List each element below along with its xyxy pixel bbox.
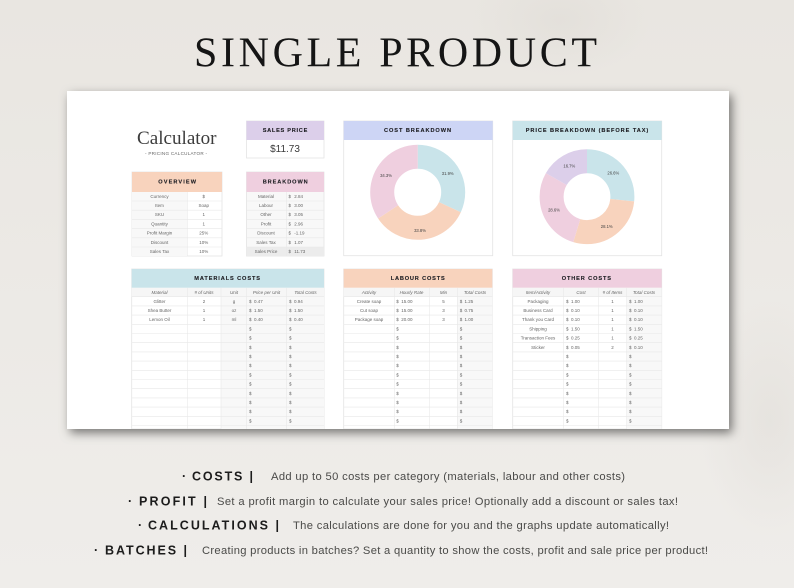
table: labour costs: 15.00 [401,308,413,313]
table: materials costs: 0.40 [294,317,303,322]
table: labour costs: $ [460,354,463,359]
panel: breakdown: $ [288,212,292,217]
table: labour costs: $ [460,326,463,331]
feature: profit: PROFIT | [139,494,207,508]
panel: breakdown: Labour [259,203,274,208]
table: other costs: Business Card [523,308,553,313]
table: other costs [513,269,662,430]
panel: breakdown: 3.05 [294,212,304,217]
panel: price breakdown chart [513,121,662,256]
table: materials costs: $ [289,317,292,322]
table: labour costs: $ [396,400,399,405]
table: labour costs: $ [460,308,463,313]
table: other costs: $ [566,336,569,341]
panel: price breakdown chart: 28.6% [548,208,560,212]
table: labour costs: $ [396,418,399,423]
table: materials costs: 2 [203,299,206,304]
panel: overview: $ [202,194,205,199]
table: other costs: $ [629,345,632,350]
table: other costs: 1 [611,317,614,322]
table: other costs: $ [629,308,632,313]
panel: breakdown: Other [260,212,272,217]
table: labour costs: $ [460,345,463,350]
table: other costs: 1.00 [571,299,580,304]
table: other costs: OTHER COSTS [562,276,611,282]
table: other costs: 0.10 [634,317,643,322]
table: materials costs: 1 [203,308,206,313]
table: labour costs: 3 [442,317,445,322]
table: labour costs: $ [460,363,463,368]
table: labour costs: 20.00 [401,317,413,322]
feature: calculations: CALCULATIONS | [148,518,279,532]
table: materials costs: 1.50 [294,308,303,313]
table: materials costs: # of Units [194,290,214,295]
table: other costs: 1.00 [634,299,643,304]
table: materials costs: $ [289,409,292,414]
table: materials costs: Total Costs [294,290,317,295]
table: materials costs: Unit [230,290,239,295]
table: labour costs: Cut soap [360,308,379,313]
table: labour costs: Total Costs [464,290,487,295]
table: materials costs: $ [249,345,252,350]
panel: overview: 10% [199,249,208,254]
table: materials costs: $ [289,372,292,377]
panel: sales price [246,121,324,158]
table: materials costs: $ [249,354,252,359]
table: other costs: $ [566,363,569,368]
panel: breakdown: 1.07 [294,240,304,245]
panel: overview [132,172,222,256]
panel: breakdown: Sales Tax [256,240,276,245]
table: materials costs: $ [289,336,292,341]
table: other costs: $ [629,372,632,377]
table: other costs: 1 [611,299,614,304]
table: labour costs: $ [396,409,399,414]
table: labour costs: $ [396,326,399,331]
table: materials costs: Price per Unit [253,290,281,295]
table: materials costs: 0.94 [294,299,303,304]
panel: price breakdown chart: 16.7% [563,164,576,168]
panel: cost breakdown chart: 33.8% [414,228,426,233]
panel: breakdown [246,172,324,256]
table: other costs: $ [629,418,632,423]
table: labour costs: $ [460,418,463,423]
panel: overview: Currency [150,194,169,199]
table: materials costs: $ [249,299,252,304]
table: labour costs: 15.00 [401,299,413,304]
panel: breakdown: 3.00 [294,203,304,208]
table: labour costs: $ [396,391,399,396]
title: SINGLE PRODUCT [194,30,597,76]
table: labour costs: Activity [361,290,377,295]
panel: sales price: SALES PRICE [263,128,308,134]
panel: overview: SKU [155,212,164,217]
table: labour costs: 3 [442,308,445,313]
feature: costs [182,470,625,484]
table: other costs: Transaction Fees [521,336,556,341]
feature: costs: Add up to 50 costs per category (materials, labour and other costs) [271,471,625,483]
panel: breakdown: 2.84 [294,194,304,199]
panel: breakdown: -1.19 [294,231,305,236]
panel: breakdown: $ [288,240,292,245]
table: materials costs: $ [289,354,292,359]
table: materials costs: $ [289,345,292,350]
table: materials costs: oz [232,308,237,313]
table: materials costs: ml [232,317,236,322]
table: materials costs: Material [151,290,168,295]
table: materials costs: $ [289,363,292,368]
table: labour costs: $ [460,400,463,405]
table: other costs: $ [629,317,632,322]
table: other costs: $ [566,345,569,350]
panel: overview: 1 [202,221,205,226]
feature: batches: BATCHES | [105,544,187,558]
feature: calculations [138,518,669,532]
table: labour costs: $ [396,372,399,377]
table: labour costs: $ [460,317,463,322]
table: other costs: $ [566,299,569,304]
table: other costs: 0.10 [571,317,580,322]
panel: overview: OVERVIEW [158,180,197,186]
feature: batches: · [94,544,98,558]
table: other costs: 2 [611,345,614,350]
donut chart: cost breakdown [382,157,453,228]
table: other costs: 0.10 [634,345,643,350]
panel: overview: Sales Tax [150,249,170,254]
table: materials costs: MATERIALS COSTS [194,276,260,282]
table: other costs: $ [629,400,632,405]
panel: breakdown: Profit [261,221,272,226]
panel: overview: Item [155,203,164,208]
panel: overview: Profit Margin [147,231,173,236]
panel: cost breakdown chart [344,121,493,256]
panel: cost breakdown chart: COST BREAKDOWN [384,128,451,134]
table: other costs: $ [566,354,569,359]
feature: costs: COSTS | [192,470,253,484]
panel: overview: Discount [151,240,169,245]
table: materials costs: $ [249,382,252,387]
table: labour costs: $ [396,336,399,341]
table: materials costs: $ [289,418,292,423]
table: materials costs: $ [289,391,292,396]
heading: calculator [138,130,216,155]
table: materials costs: $ [289,400,292,405]
table: materials costs: $ [289,299,292,304]
feature: calculations: The calculations are done for you and the graphs update automatically! [293,520,669,532]
table: labour costs: $ [396,345,399,350]
feature: calculations: · [138,518,142,532]
heading: calculator: - PRICING CALCULATOR - [145,151,207,156]
table: labour costs: $ [396,382,399,387]
panel: breakdown: Discount [257,231,275,236]
table: labour costs: LABOUR COSTS [391,276,445,282]
panel: breakdown: $ [288,194,292,199]
table: materials costs: $ [249,363,252,368]
table: materials costs: Shea Butter [148,308,172,313]
table: materials costs: $ [249,326,252,331]
table: other costs: $ [566,326,569,331]
panel: price breakdown chart: PRICE BREAKDOWN (BEFORE TAX) [526,128,648,134]
table: materials costs: 0.47 [254,299,263,304]
feature: profit: · [128,494,132,508]
table: labour costs: $ [460,372,463,377]
panel: cost breakdown chart: 31.9% [442,171,454,176]
panel: overview: 10% [199,240,208,245]
table: other costs: $ [629,391,632,396]
table: other costs: Item/Activity [526,290,551,295]
table: materials costs: 1 [203,317,206,322]
panel: breakdown: $ [288,203,292,208]
table: other costs: 0.10 [634,308,643,313]
panel: overview: Quantity [151,221,169,226]
panel: breakdown: Sales Price [255,249,278,254]
table: labour costs: $ [460,299,463,304]
table: other costs: $ [629,382,632,387]
table: materials costs: $ [249,418,252,423]
panel: overview: 25% [199,231,208,236]
table: materials costs: $ [289,308,292,313]
table: other costs: 1 [611,336,614,341]
table: labour costs: $ [396,308,399,313]
table: labour costs: $ [460,382,463,387]
table: materials costs: $ [249,372,252,377]
panel: cost breakdown chart: 34.3% [380,173,392,178]
table: materials costs: $ [249,317,252,322]
table: other costs: 0.25 [634,336,643,341]
table: other costs: $ [629,299,632,304]
table: other costs: Total Costs [633,290,656,295]
table: materials costs: $ [249,336,252,341]
heading: calculator: Calculator [137,128,217,149]
panel: price breakdown chart: 28.1% [601,224,613,229]
table: other costs: 0.10 [571,308,580,313]
panel: breakdown: $ [288,221,292,226]
donut chart: price breakdown [552,161,622,232]
table: labour costs: $ [396,363,399,368]
table: other costs: 1 [611,308,614,313]
table: materials costs: g [233,299,236,304]
table: other costs: Shipping [529,326,547,331]
table: materials costs: 0.40 [254,317,263,322]
table: other costs: $ [629,336,632,341]
table: labour costs: 0.75 [464,308,474,313]
table: other costs: $ [629,409,632,414]
panel: breakdown: $ [288,231,292,236]
feature: profit: Set a profit margin to calculate your sales price! Optionally add a discount or sales tax! [217,496,678,508]
table: other costs: Thank you Card [522,317,554,322]
table: labour costs: Create soap [357,299,382,304]
panel: breakdown: BREAKDOWN [263,180,308,186]
table: materials costs: 1.50 [254,308,263,313]
table: labour costs: Package soap [355,317,384,322]
table: materials costs: $ [249,308,252,313]
table: materials costs [132,269,324,430]
panel: overview: 1 [202,212,205,217]
panel: breakdown: $ [288,249,292,254]
table: labour costs: $ [460,409,463,414]
table: materials costs: Lemon Oil [149,317,170,322]
panel: price breakdown chart: 26.6% [607,170,620,176]
table: other costs: $ [566,418,569,423]
table: other costs: $ [629,326,632,331]
table: other costs: 1.50 [571,326,580,331]
table: other costs: $ [566,382,569,387]
table: other costs: $ [566,391,569,396]
table: other costs: Cost [576,290,586,295]
panel: spreadsheet sheet [67,91,729,430]
table: labour costs: Min [440,290,448,295]
panel: breakdown: 11.73 [294,249,306,254]
table: labour costs: $ [396,299,399,304]
table: other costs: 0.25 [571,336,580,341]
table: other costs: $ [566,317,569,322]
table: other costs: 1.50 [634,326,643,331]
table: labour costs: 1.25 [464,299,474,304]
table: labour costs [344,269,492,430]
table: labour costs: $ [396,317,399,322]
table: other costs: 1 [611,326,614,331]
table: materials costs: $ [249,409,252,414]
feature: batches: Creating products in batches? Set a quantity to show the costs, profit and sale price per product! [202,545,708,557]
table: labour costs: 1.00 [464,317,474,322]
table: labour costs: 5 [442,299,445,304]
table: other costs: $ [566,409,569,414]
table: other costs: Sticker [531,345,545,350]
table: materials costs: $ [289,326,292,331]
table: other costs: Packaging [527,299,549,304]
table: materials costs: $ [249,400,252,405]
table: labour costs: $ [460,391,463,396]
table: labour costs: $ [396,354,399,359]
table: labour costs: $ [460,336,463,341]
panel: overview: Soap [198,203,209,208]
table: other costs: $ [566,372,569,377]
table: other costs: $ [629,354,632,359]
panel: breakdown: 2.96 [294,221,304,226]
table: other costs: $ [629,363,632,368]
panel: sales price: $11.73 [270,144,300,155]
table: other costs: # of Items [603,290,623,295]
table: materials costs: $ [289,382,292,387]
feature: costs: · [182,470,186,484]
table: other costs: 0.05 [571,345,580,350]
table: materials costs: Glitter [153,299,166,304]
panel: breakdown: Material [258,194,274,199]
table: materials costs: $ [249,391,252,396]
table: labour costs: Hourly Rate [400,290,424,295]
table: other costs: $ [566,400,569,405]
table: other costs: $ [566,308,569,313]
